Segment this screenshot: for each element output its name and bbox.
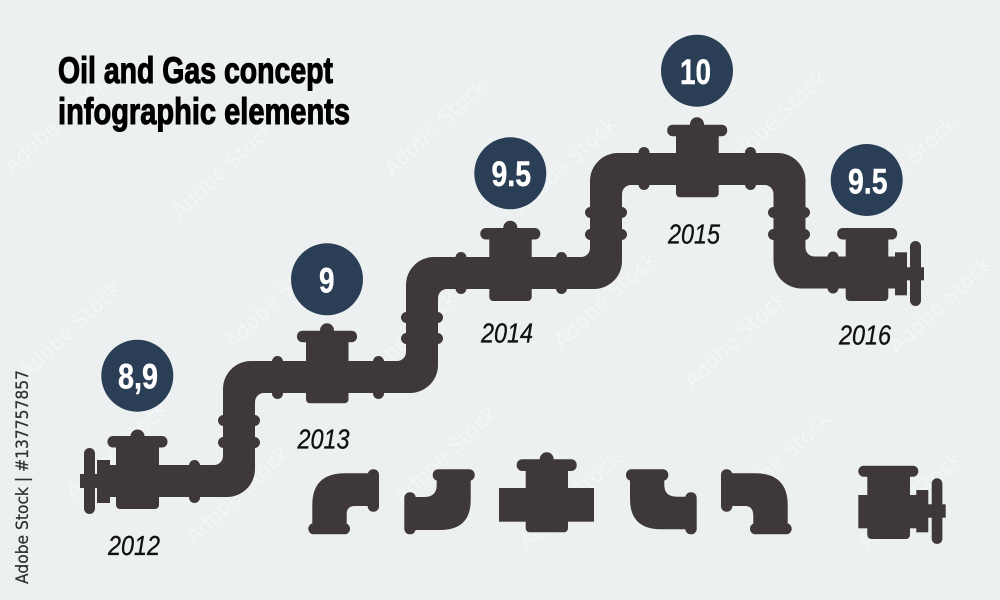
badge: 10 <box>661 35 733 107</box>
pipeline: main pipe <box>100 147 900 503</box>
valve 2013 <box>297 323 357 403</box>
watermark pattern: Adobe Stock <box>219 246 332 353</box>
year labels: 2013 <box>297 423 350 454</box>
watermark pattern: Adobe Stock <box>719 66 832 173</box>
badge: 9.5 (2016) <box>831 144 903 216</box>
watermark pattern: Adobe Stock <box>849 111 962 218</box>
part: end valve <box>858 466 946 544</box>
pipe collars <box>189 147 838 503</box>
side credit text: Adobe Stock | #137757857 <box>13 370 33 584</box>
title: Oil and Gas concept <box>58 50 333 91</box>
title <box>58 50 350 132</box>
watermark pattern: Adobe Stock <box>514 446 627 553</box>
badge: 9.5 (2016): 9.5 <box>848 162 888 202</box>
valve 2016 <box>837 228 924 306</box>
watermark pattern: Adobe Stock <box>884 251 997 358</box>
badge: 9: 9 <box>319 262 334 300</box>
watermark pattern: Adobe Stock <box>379 73 492 180</box>
year labels <box>107 218 891 561</box>
watermark pattern: Adobe Stock <box>854 446 967 553</box>
badge: 9 <box>291 243 363 315</box>
year labels: 2016 <box>838 319 891 350</box>
valve 2015 <box>667 117 727 197</box>
watermark pattern: Adobe Stock <box>61 396 174 503</box>
watermark pattern: Adobe Stock <box>0 71 112 178</box>
title: infographic elements <box>58 91 350 132</box>
watermark pattern: Adobe Stock <box>181 441 294 548</box>
year labels: 2015 <box>667 218 720 249</box>
part: tee valve <box>499 452 594 532</box>
watermark pattern: Adobe Stock <box>549 246 662 353</box>
watermark pattern: Adobe Stock <box>509 111 622 218</box>
part: elbow down-left <box>721 469 792 534</box>
watermark pattern: Adobe Stock <box>167 116 280 223</box>
year labels: 2014 <box>480 317 533 348</box>
part: elbow up-right <box>626 469 697 534</box>
watermark pattern: Adobe Stock <box>724 406 837 513</box>
badge: 8,9 <box>101 340 173 412</box>
badge: 9.5 (2014): 9.5 <box>492 155 531 194</box>
watermark pattern: Adobe Stock <box>349 286 462 393</box>
watermark pattern: Adobe Stock <box>389 401 502 508</box>
part: elbow down-right <box>308 469 379 534</box>
watermark pattern: Adobe Stock <box>14 276 127 383</box>
badge: 8,9: 8,9 <box>118 358 158 396</box>
valve 2012 <box>80 430 168 514</box>
badge: 10: 10 <box>680 53 711 92</box>
watermark pattern: Adobe Stock <box>679 286 792 393</box>
year labels: 2012 <box>107 530 160 561</box>
valve 2014 <box>480 221 540 301</box>
part: elbow up-left <box>404 469 475 534</box>
badge: 9.5 (2014) <box>474 137 546 209</box>
